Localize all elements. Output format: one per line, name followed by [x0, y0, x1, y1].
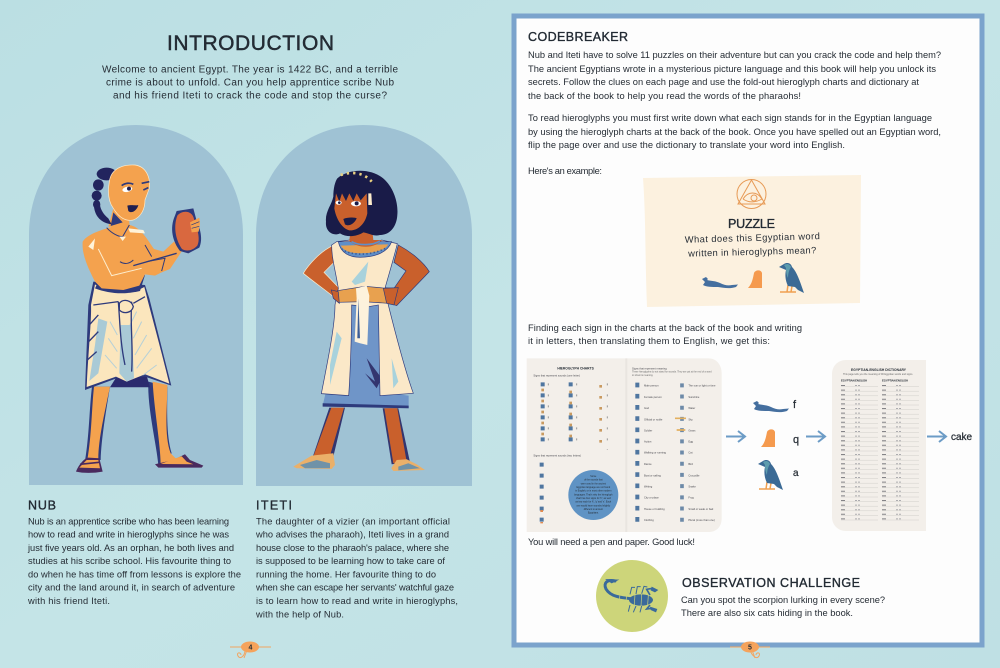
- right column labels: Water: [688, 406, 695, 410]
- hieroglyph charts spread: to show its meaning.: [632, 374, 654, 377]
- left column signs: [542, 382, 571, 523]
- right column labels: God: [644, 406, 650, 410]
- illustration: Nub: [76, 165, 203, 473]
- text block: chart explanation: it in letters, then translating them to English, we get this:: [528, 336, 770, 346]
- right column labels: Cat: [688, 451, 693, 455]
- callout: blue circle note: languages. That's why the hieroglyph: [574, 493, 613, 496]
- text block: Iteti biography: when she can escape her servants' watchful gaze: [255, 583, 454, 593]
- text block: intro paragraph: The ancient Egyptians wrote in a mysterious picture language and this book will help you unlock its: [528, 64, 936, 74]
- text block: Iteti biography: The daughter of a vizier (an important official: [256, 516, 450, 526]
- puzzle question: written in hieroglyphs mean?: [687, 245, 816, 259]
- text block: intro paragraph: Nub and Iteti have to solve 11 puzzles on their adventure but can you crack the code and help them?: [528, 50, 941, 60]
- callout: blue circle note: Some: [590, 476, 597, 478]
- right column labels: City or place: [644, 496, 659, 500]
- hieroglyph charts spread: Signs that represent sounds (two letters): [533, 454, 581, 458]
- text block: chart explanation: [528, 323, 802, 346]
- callout: blue circle note: of the sounds that: [584, 479, 603, 482]
- icon: eye in triangle: [737, 180, 766, 208]
- right column labels: Official or noble: [644, 417, 663, 421]
- arrow: dictionary to answer: [927, 431, 946, 442]
- answer: cake: cake: [951, 432, 972, 443]
- worked hieroglyph example: q: [793, 434, 799, 446]
- text block: observation challenge: Can you spot the scorpion lurking in every scene?: [681, 595, 885, 605]
- text block: Nub biography: just five years old. As an orphan, he both lives and: [27, 543, 234, 553]
- callout: blue circle note: Egyptian language are not found: [576, 486, 611, 489]
- right column labels: [644, 384, 716, 522]
- right column signs: [631, 383, 643, 523]
- right column labels: Sky: [688, 417, 693, 421]
- right column labels: Egg: [688, 440, 694, 444]
- arrow: signs to dictionary: [806, 431, 825, 442]
- callout: blue circle note: [568, 470, 618, 520]
- callout: blue circle note: in English, or in most other modern: [575, 490, 612, 493]
- right column labels: Bird: [688, 462, 694, 466]
- title: INTRODUCTION: [167, 32, 334, 55]
- hieroglyph charts spread: Signs that represent sounds (one letter): [533, 374, 580, 378]
- text block: Nub biography: Nub is an apprentice scribe who has been learning: [28, 516, 229, 526]
- callout: blue circle note: chart has four signs for 'h', as well: [576, 497, 611, 500]
- page number 5: 5: [748, 644, 752, 652]
- text block: Nub biography: with his friend Iteti.: [27, 596, 110, 606]
- right column labels: Walking or running: [644, 451, 667, 455]
- heading: codebreaker: CODEBREAKER: [528, 30, 628, 44]
- panel: codebreaker: [514, 16, 982, 645]
- hieroglyph charts spread: Signs that represent meaning: [632, 366, 667, 370]
- right column labels: Female person: [644, 395, 662, 399]
- text block: Iteti biography: is to learn how to read and write in hieroglyphs,: [256, 596, 458, 606]
- text block: intro paragraph: [528, 50, 941, 101]
- hieroglyph charts spread: These hieroglyphs do not stand for sounds. They are put at the end of a word: [632, 371, 712, 374]
- illustration: Iteti: [293, 171, 429, 471]
- right column labels: Boat or sailing: [644, 473, 661, 477]
- callout: blue circle note: one would have sounded slightly: [576, 504, 611, 507]
- text: closing line: You will need a pen and paper. Good luck!: [528, 537, 695, 547]
- worked hieroglyph example: [753, 399, 799, 490]
- panel frame: [514, 16, 982, 645]
- text block: Iteti biography: house close to the pharaoh's palace, where she: [256, 543, 449, 553]
- puzzle question: [685, 231, 820, 259]
- text block: Nub biography: do when he has time off from lessons is explore the: [28, 570, 241, 580]
- right column labels: Male person: [644, 384, 659, 388]
- text block: chart explanation: Finding each sign in the charts at the back of the book and writing: [528, 323, 802, 333]
- text block: instructions: flip the page over and use the dictionary to translate your word into English.: [528, 140, 845, 150]
- right column labels: Grass: [688, 428, 696, 432]
- heading: puzzle: PUZZLE: [728, 217, 775, 231]
- heading: observation challenge: OBSERVATION CHALLENGE: [682, 576, 860, 590]
- text block: Iteti biography: running the home. Her favourite thing to do: [256, 570, 436, 580]
- text block: Nub biography: city and the land around it, in search of adventure: [28, 583, 235, 593]
- dictionary page: This page tells you the meaning of 90 Egyptian words and signs.: [843, 373, 913, 376]
- right column labels: Dance: [644, 462, 652, 466]
- page number 5: [730, 642, 770, 658]
- heading: Iteti: ITETI: [256, 498, 292, 512]
- hieroglyph charts spread: HIEROGLYPH CHARTS: [557, 366, 595, 370]
- text block: observation challenge: There are also six cats hiding in the book.: [681, 608, 853, 618]
- callout: blue circle note: Egyptians.: [588, 512, 599, 515]
- right column labels: Soldier: [644, 428, 652, 432]
- right column labels: House or building: [644, 507, 665, 511]
- text block: intro paragraph: the back of the book to help you read the words of the pharaohs!: [528, 91, 801, 101]
- text block: Iteti biography: [255, 516, 458, 620]
- dictionary page: EGYPTIAN ENGLISH: [841, 378, 867, 382]
- page number 4: 4: [248, 644, 252, 652]
- text block: Nub biography: studies at his scribe school. His favourite thing to: [28, 556, 231, 566]
- right column labels: The sun or light or time: [688, 384, 716, 388]
- callout: blue circle note: different to ancient: [584, 508, 603, 511]
- dictionary page: EGYPTIAN-ENGLISH DICTIONARY: [851, 368, 907, 372]
- right column labels: Frog: [688, 496, 694, 500]
- icon: scorpion badge: [596, 560, 668, 632]
- text block: intro paragraph: secrets. Follow the clues on each page and use the fold-out hieroglyph charts and dictionary at: [528, 77, 919, 87]
- text: example lead-in: Here's an example:: [528, 166, 602, 176]
- introduction text: crime is about to unfold. Can you help apprentice scribe Nub: [106, 78, 394, 89]
- panel: Nub portrait: [29, 125, 243, 485]
- worked hieroglyph example: a: [793, 468, 799, 479]
- callout: blue circle note: as two each for 'k', 'q' and 's'. Each: [575, 501, 612, 504]
- arch behind Nub: [29, 125, 243, 485]
- right column labels: Plural (more than one): [688, 518, 715, 522]
- right column labels: Small or weak or bad: [688, 507, 714, 511]
- right column labels: Snake: [688, 484, 696, 488]
- text block: instructions: To read hieroglyphs you must first write down what each sign stands for in the Egyptian language: [528, 113, 932, 123]
- hieroglyph charts spread: [527, 358, 722, 532]
- right column labels: Writing: [644, 484, 653, 488]
- puzzle hieroglyphs: [702, 263, 804, 293]
- heading: Nub: NUB: [28, 498, 56, 512]
- right column labels: Clothing: [644, 518, 654, 522]
- text block: instructions: [528, 113, 941, 150]
- text block: Iteti biography: with the help of Nub.: [255, 610, 344, 620]
- text block: instructions: by using the hieroglyph charts at the back of the book. Once you have spelled out an Egyptian word,: [528, 127, 941, 137]
- arrow: charts to signs: [726, 431, 745, 442]
- puzzle card: [643, 175, 861, 307]
- puzzle question: What does this Egyptian word: [685, 231, 820, 245]
- introduction text: Welcome to ancient Egypt. The year is 1422 BC, and a terrible: [102, 64, 398, 76]
- introduction text: [102, 64, 398, 102]
- right column labels: Crocodile: [688, 473, 700, 477]
- text block: Iteti biography: who advises the pharaoh), Iteti lives in a grand: [255, 530, 449, 540]
- page number 4: [230, 642, 271, 658]
- callout: blue circle note: were used in the ancient: [581, 482, 606, 485]
- text block: Iteti biography: is supposed to be learning how to take care of: [256, 556, 445, 566]
- dictionary page: [832, 360, 926, 531]
- text block: Nub biography: [27, 516, 241, 606]
- right column labels: Action: [644, 440, 652, 444]
- dictionary page: EGYPTIAN ENGLISH: [882, 378, 908, 382]
- text block: Nub biography: how to read and write in hieroglyphs since he was: [28, 530, 229, 540]
- right column labels: Sunshine: [688, 395, 700, 399]
- worked hieroglyph example: f: [793, 399, 797, 411]
- text block: observation challenge: [681, 595, 885, 618]
- panel: Iteti portrait: [256, 125, 472, 486]
- introduction text: and his friend Iteti to crack the code and stop the curse?: [113, 90, 387, 102]
- arch behind Iteti: [256, 125, 472, 486]
